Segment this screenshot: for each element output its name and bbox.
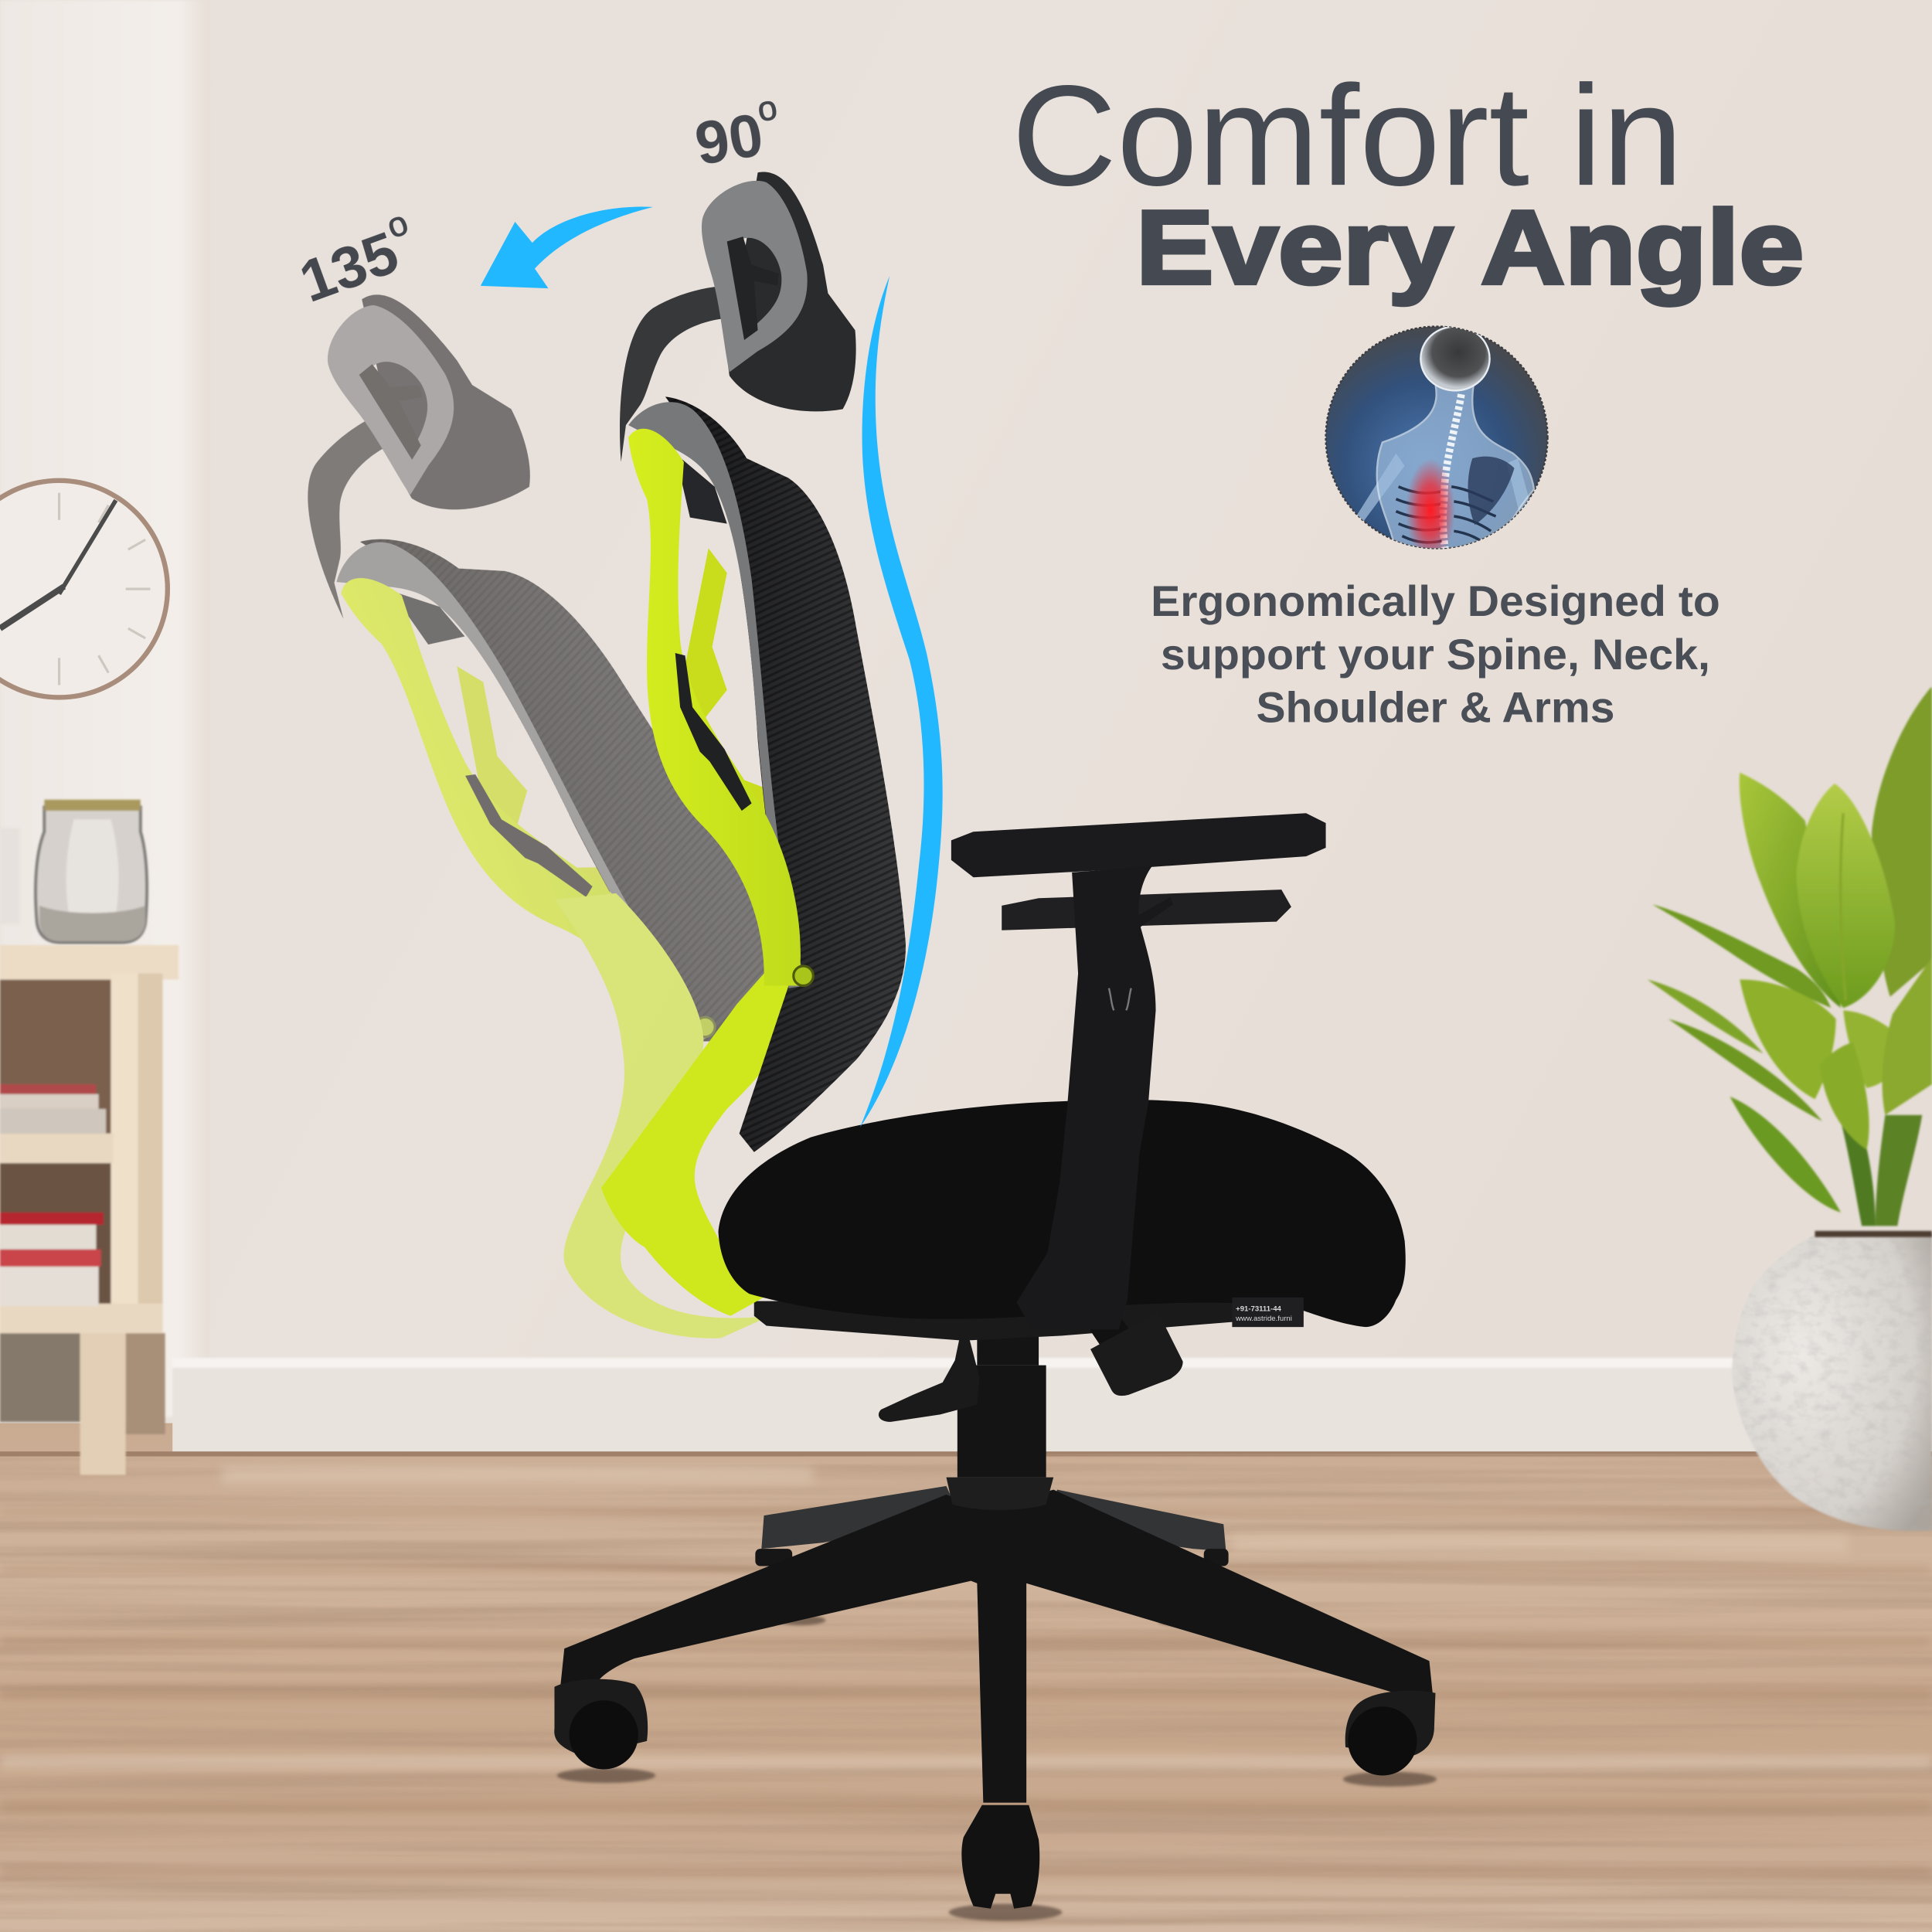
lumbar arm [675, 653, 752, 811]
rear yellow struts [685, 549, 807, 981]
blue rotation arrow [481, 207, 653, 288]
background: left column [0, 0, 209, 1417]
spine [1443, 394, 1461, 560]
background: wooden floor [0, 1423, 1932, 1932]
description text: Shoulder & Arms [1256, 682, 1614, 731]
ribs [1396, 487, 1496, 546]
ghost backrest and headrest [308, 294, 764, 1042]
label: 90 degrees: o [755, 89, 780, 129]
mechanism under seat [754, 1301, 1247, 1341]
torso [1377, 384, 1534, 554]
title: Every Angle [1136, 189, 1804, 306]
cup behind jar [0, 828, 20, 924]
gas lift column [946, 1327, 1053, 1510]
lower yellow frame [601, 974, 798, 1316]
head [1420, 327, 1490, 390]
main chair [554, 172, 1437, 1921]
arm column right bracket [1124, 897, 1173, 951]
headrest pad [727, 172, 856, 411]
backrest grey rim [628, 402, 806, 988]
back legs [761, 1486, 1226, 1551]
icon: spine x-ray [1326, 327, 1548, 562]
label: 90 degrees [689, 89, 786, 178]
armrest second [1002, 889, 1291, 930]
description text: support your Spine, Neck, [1161, 630, 1710, 679]
caster left [554, 1679, 648, 1770]
label: 135 degrees: 135 [291, 219, 406, 315]
chair base [554, 1327, 1435, 1909]
caster front [961, 1805, 1039, 1909]
seat cushion [719, 1100, 1406, 1327]
caster shadows [557, 1615, 1437, 1921]
plant leaves [1648, 688, 1932, 1237]
headrest dark clamp [727, 236, 779, 340]
seat label: www.astride.furni [1235, 1315, 1292, 1323]
yellow frame upper [628, 429, 801, 986]
wall clock [0, 478, 170, 700]
label: 90 degrees: 90 [690, 100, 767, 178]
seat label [1232, 1298, 1304, 1327]
potted plant [1648, 688, 1932, 1531]
arms [1355, 454, 1532, 522]
background: wall [0, 0, 1932, 1466]
description text [1151, 577, 1720, 731]
glass jar [36, 800, 147, 943]
blue spine curve [860, 276, 943, 1128]
title [1012, 56, 1804, 306]
ghost chair at 135 degrees [308, 294, 764, 1338]
seat label: +91-73111-44 [1236, 1304, 1282, 1313]
front legs [560, 1490, 1433, 1803]
rim bracket [675, 454, 727, 524]
red pain glow [1406, 458, 1455, 562]
headrest bracket [620, 286, 734, 462]
back casters [755, 1549, 1229, 1617]
description text: Ergonomically Designed to [1151, 577, 1720, 625]
title: Comfort in [1012, 56, 1683, 216]
background: skirting board [172, 1358, 1762, 1454]
shelf unit [0, 945, 179, 1475]
tilt knob [1090, 1294, 1183, 1396]
label: 135 degrees: o [382, 204, 413, 246]
arm column [1016, 866, 1156, 1329]
caster right [1345, 1691, 1435, 1776]
backrest and headrest main [620, 172, 906, 1152]
shoulder blade [1468, 457, 1515, 525]
ghost lower frame [554, 893, 770, 1338]
plant pot [1732, 1235, 1932, 1531]
headrest grey ring [702, 181, 808, 372]
frame pivot [794, 966, 813, 986]
backrest mesh [665, 396, 906, 1152]
height lever [879, 1331, 980, 1422]
armrest top [951, 813, 1326, 877]
